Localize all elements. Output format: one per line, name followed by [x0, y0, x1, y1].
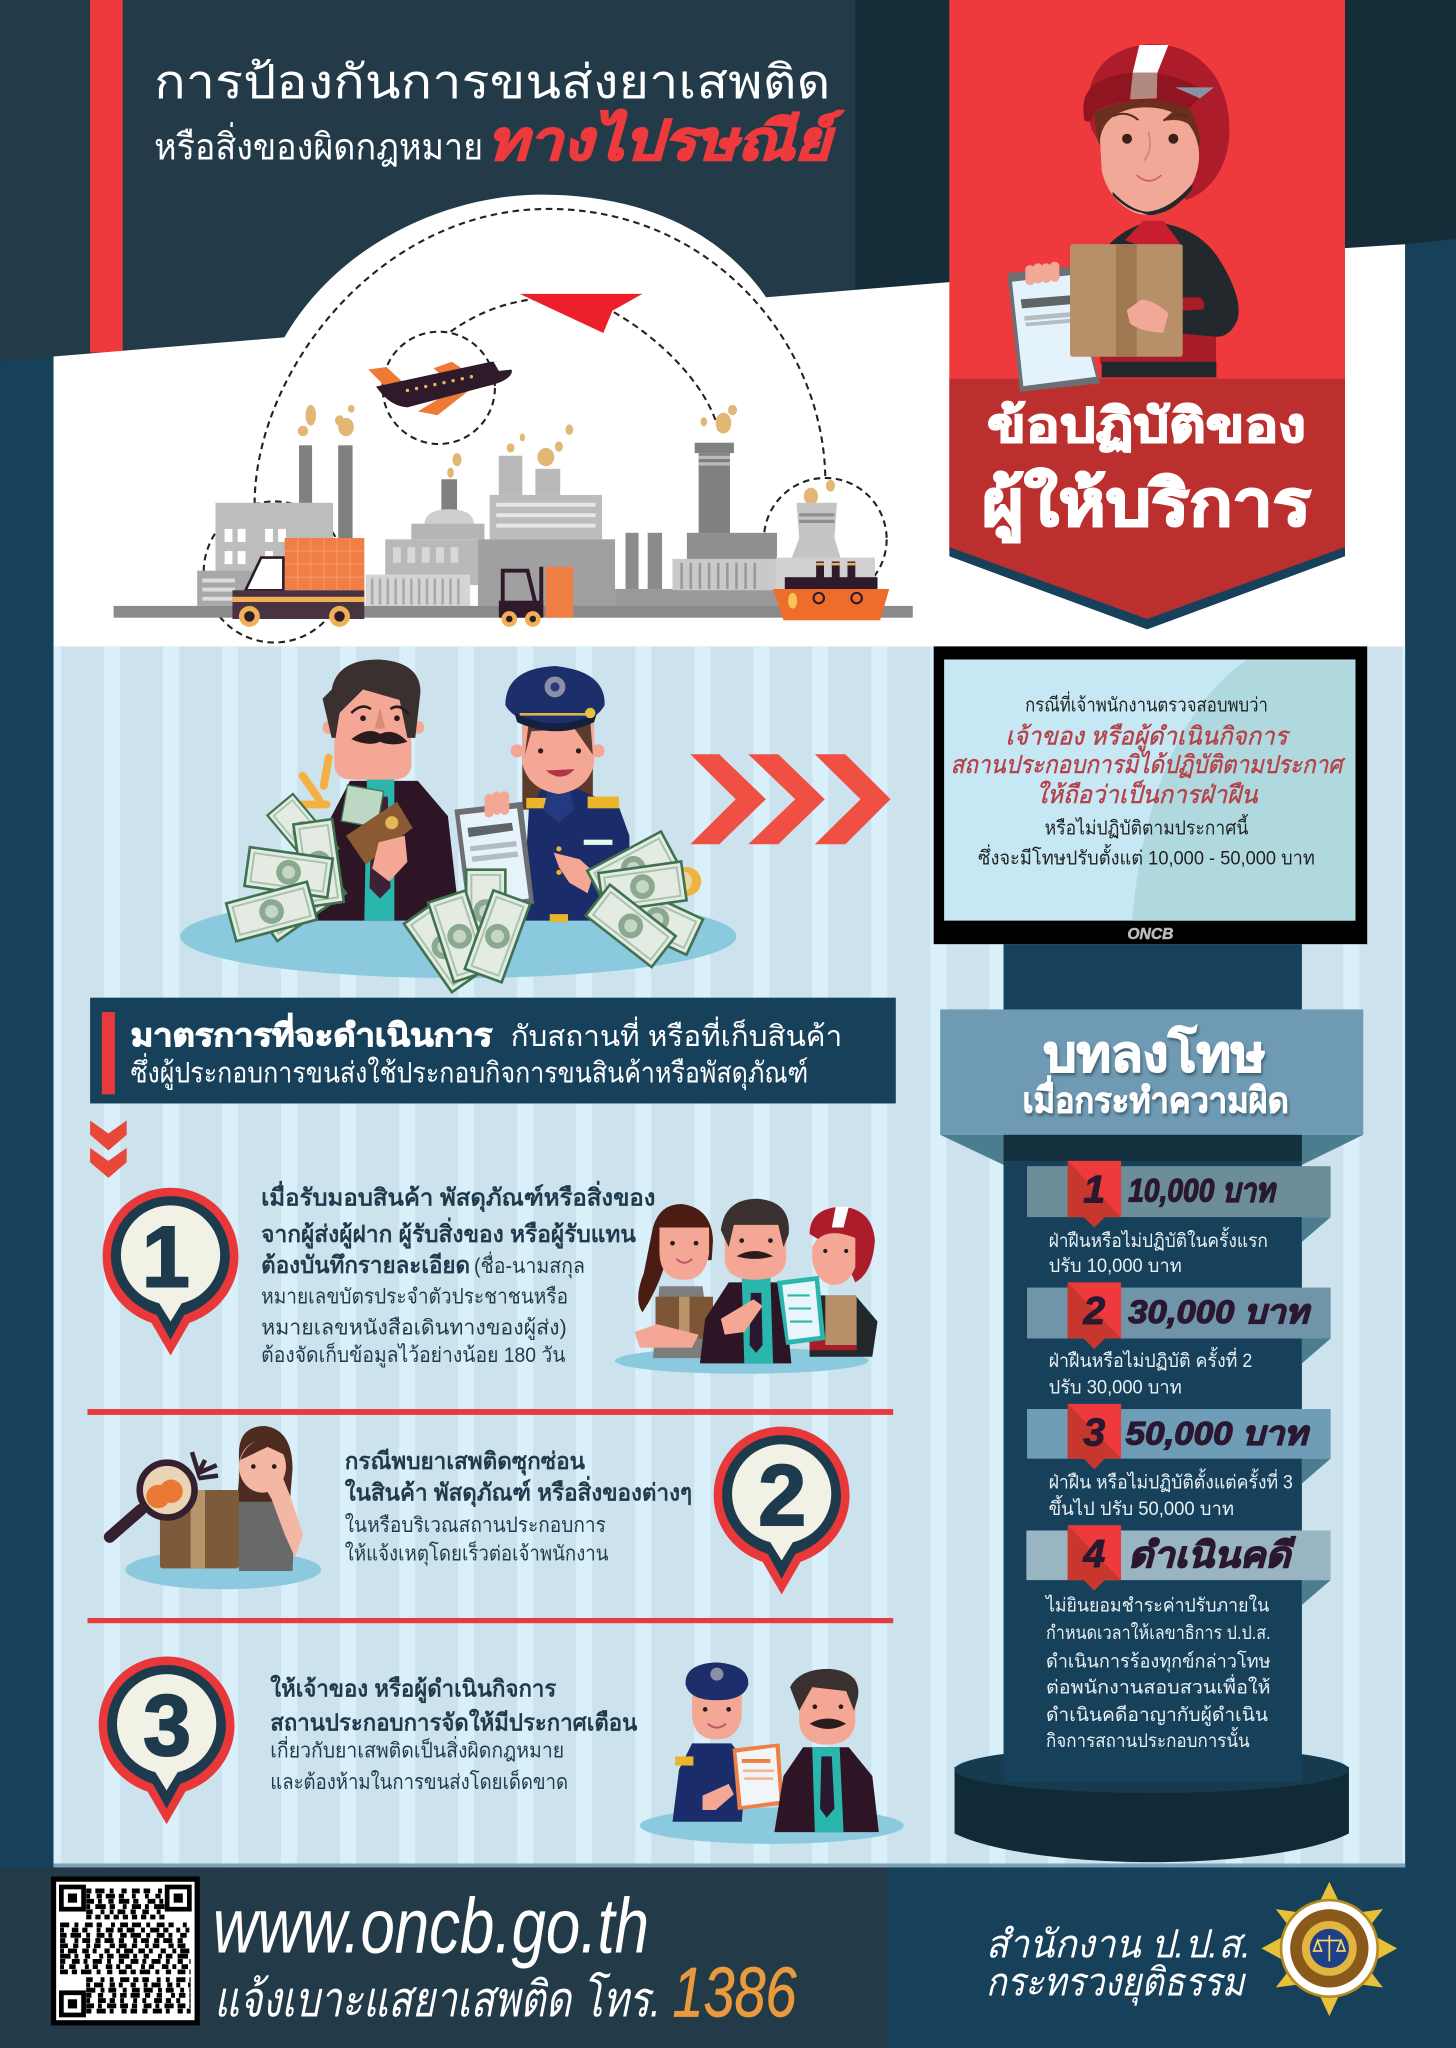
tier 2 description: ปรับ 30,000 บาท — [1049, 1377, 1182, 1398]
step 1 text: หมายเลขหนังสือเดินทางของผู้ส่ง) — [261, 1317, 567, 1341]
factory: ground — [114, 606, 913, 618]
notice text: สถานประกอบการมิได้ปฏิบัติตามประกาศ — [951, 750, 1346, 779]
factory: chimneys left — [299, 445, 353, 543]
icon: airplane — [368, 362, 512, 415]
step 1 text — [261, 1180, 656, 1368]
money scene ellipse — [180, 895, 736, 978]
tier 3 description: ขึ้นไป ปรับ 50,000 บาท — [1049, 1495, 1234, 1520]
agency name: สำนักงาน ป.ป.ส. — [986, 1924, 1251, 1967]
notice text — [951, 692, 1346, 869]
icon: paper plane — [520, 294, 642, 333]
panel: measures header: ซึ่งผู้ประกอบการขนส่งใช้ประกอบกิจการขนสินค้าหรือพัสดุภัณฑ์ — [131, 1053, 808, 1091]
step 3 pin: 3 — [143, 1678, 191, 1774]
divider red line 1 — [87, 1409, 893, 1415]
step 1 text: เมื่อรับมอบสินค้า พัสดุภัณฑ์หรือสิ่งของ — [261, 1180, 656, 1212]
tier 4 description — [1044, 1594, 1271, 1752]
illustration: police officer with clipboard — [454, 666, 629, 922]
factory: central block — [499, 456, 522, 495]
illustration: man with wallet — [297, 659, 460, 921]
red vertical stripe — [90, 0, 123, 353]
illustration: staff group — [615, 1199, 878, 1374]
icon: ship — [773, 562, 889, 620]
panel: penalties banner: บทลงโทษ — [1043, 1024, 1265, 1082]
fine tier 1 — [1027, 1161, 1331, 1277]
step 3 text: สถานประกอบการจัดให้มีประกาศเตือน — [270, 1708, 637, 1735]
step 1 text: (ชื่อ-นามสกุล — [474, 1251, 585, 1279]
tier 4 description: ดำเนินคดีอาญากับผู้ดำเนิน — [1046, 1704, 1268, 1726]
illustration: courier with parcel — [1007, 44, 1239, 392]
banner lower dark red — [949, 379, 1345, 620]
tier 3 description — [1049, 1469, 1293, 1520]
cash: centre pile — [404, 870, 530, 992]
icon: down chevrons — [90, 1120, 127, 1178]
tier 4 description: กิจการสถานประกอบการนั้น — [1046, 1727, 1250, 1752]
fine tier 3: 50,000 บาท — [1126, 1414, 1311, 1451]
factory: smoke puffs — [298, 405, 835, 505]
fine tier 4 — [1026, 1525, 1331, 1752]
step 2 pin: 2 — [758, 1448, 806, 1544]
step 1 text: ต้องจัดเก็บข้อมูลไว้อย่างน้อย 180 วัน — [261, 1341, 565, 1368]
factory: right chimney group — [625, 533, 639, 592]
tier 2 description: ฝ่าฝืนหรือไม่ปฏิบัติ ครั้งที่ 2 — [1049, 1347, 1252, 1372]
cash: left pile — [226, 794, 346, 941]
hotline number: 1386 — [673, 1952, 797, 2031]
step 2 pin — [714, 1427, 850, 1594]
step 2 text — [345, 1448, 692, 1567]
panel: monitor notice — [934, 646, 1367, 944]
factory skyline — [114, 405, 913, 618]
tier 4 description: กำหนดเวลาให้เลขาธิการ ป.ป.ส. — [1046, 1622, 1271, 1644]
banner heading 2: ผู้ให้บริการ — [982, 467, 1311, 543]
notice text: เจ้าของ หรือผู้ดำเนินกิจการ — [1005, 723, 1290, 751]
tier 4 description: ดำเนินการร้องทุกข์กล่าวโทษ — [1046, 1651, 1271, 1674]
QR code — [51, 1877, 200, 2025]
tier 1 description — [1049, 1227, 1268, 1277]
panel: measures header: มาตรการที่จะดำเนินการ — [131, 1013, 492, 1053]
step 2 text: ในสินค้า พัสดุภัณฑ์ หรือสิ่งของต่างๆ — [345, 1475, 692, 1507]
agency name: กระทรวงยุติธรรม — [986, 1961, 1246, 2006]
banner navy edge — [949, 547, 1345, 629]
tier 3 description: ฝ่าฝืน หรือไม่ปฏิบัติตั้งแต่ครั้งที่ 3 — [1049, 1469, 1293, 1494]
coin — [671, 867, 701, 896]
fine tier 2: 30,000 บาท — [1128, 1293, 1312, 1330]
illustration: officer and owner — [640, 1662, 904, 1844]
pillar base — [955, 1746, 1349, 1862]
title: หรือสิ่งของผิดกฎหมาย — [154, 121, 483, 167]
panel: penalties banner — [940, 1009, 1363, 1165]
icon: truck — [232, 538, 364, 627]
tier 2 description — [1049, 1347, 1252, 1398]
step 3 text: ให้เจ้าของ หรือผู้ดำเนินกิจการ — [270, 1674, 557, 1703]
panel: striped light blue — [54, 646, 1405, 1867]
arrow: three chevrons — [690, 754, 891, 844]
panel: penalties banner: เมื่อกระทำความผิด — [1022, 1076, 1289, 1121]
tier 1 description: ปรับ 10,000 บาท — [1049, 1256, 1182, 1277]
dark column right of red panel — [1345, 0, 1456, 340]
cash: right pile — [586, 831, 703, 967]
hotline: แจ้งเบาะแสยาเสพติด โทร. — [214, 1971, 661, 2027]
fine tier 3: 3 — [1083, 1412, 1105, 1455]
icon: agency emblem — [1261, 1882, 1397, 2016]
step 2 text: ในหรือบริเวณสถานประกอบการ — [345, 1513, 606, 1537]
notice text: ซึ่งจะมีโทษปรับตั้งแต่ 10,000 - 50,000 บาท — [978, 843, 1315, 869]
fine tier 3 — [1027, 1404, 1331, 1520]
fine tier 2 — [1027, 1282, 1331, 1398]
pillar — [1004, 944, 1302, 1783]
notice text: ให้ถือว่าเป็นการฝ่าฝืน — [1036, 780, 1259, 809]
cash piles — [226, 794, 703, 992]
notice text: หรือไม่ปฏิบัติตามประกาศนี้ — [1045, 813, 1249, 839]
title highlight: ทางไปรษณีย์ — [487, 108, 844, 171]
website: www.oncb.go.th — [213, 1881, 649, 1969]
factory: dome building — [441, 479, 457, 511]
dark column left of red panel — [855, 0, 949, 366]
panel: monitor notice: ONCB — [1127, 926, 1173, 943]
notice text: กรณีที่เจ้าพนักงานตรวจสอบพบว่า — [1025, 692, 1268, 717]
tier 1 description: ฝ่าฝืนหรือไม่ปฏิบัติในครั้งแรก — [1049, 1227, 1268, 1252]
agency name — [986, 1924, 1251, 2006]
title — [154, 55, 844, 171]
fine tier 4: 4 — [1082, 1533, 1105, 1576]
dashed delivery routes — [204, 209, 887, 642]
footer — [0, 1867, 1456, 2048]
step 1 text: จากผู้ส่งผู้ฝาก ผู้รับสิ่งของ หรือผู้รับแทน — [261, 1217, 636, 1249]
white arch behind factory — [268, 195, 783, 392]
banner heading: ข้อปฏิบัติของ — [987, 398, 1306, 451]
panel: measures header — [90, 998, 896, 1103]
panel: measures header: กับสถานที่ หรือที่เก็บสินค้า — [511, 1016, 842, 1053]
tier 4 description: ต่อพนักงานสอบสวนเพื่อให้ — [1046, 1674, 1271, 1699]
fine tier 4: ดำเนินคดี — [1128, 1536, 1296, 1575]
panel: provider banner — [949, 0, 1345, 629]
side band: right blue — [1405, 239, 1456, 1880]
step 2 text: กรณีพบยาเสพติดซุกซ่อน — [345, 1448, 585, 1476]
white diagonal area — [54, 244, 1405, 653]
step 1 pin — [103, 1188, 238, 1355]
fine tier 1: 10,000 บาท — [1128, 1171, 1278, 1208]
icon: forklift — [499, 567, 573, 627]
step 1 text: ต้องบันทึกรายละเอียด — [261, 1252, 470, 1278]
divider red line 2 — [87, 1618, 893, 1623]
step 3 text: และต้องห้ามในการขนส่งโดยเด็ดขาด — [270, 1768, 568, 1794]
fine tier 1: 1 — [1083, 1169, 1105, 1212]
fine tier 2: 2 — [1082, 1290, 1105, 1333]
step 1 pin: 1 — [142, 1209, 190, 1305]
side band: left blue — [0, 357, 54, 1880]
step 2 text: ให้แจ้งเหตุโดยเร็วต่อเจ้าพนักงาน — [345, 1540, 609, 1567]
step 3 text: เกี่ยวกับยาเสพติดเป็นสิ่งผิดกฎหมาย — [270, 1736, 564, 1763]
step 3 pin — [99, 1656, 235, 1824]
step 1 text: หมายเลขบัตรประจำตัวประชาชนหรือ — [261, 1285, 568, 1308]
title: การป้องกันการขนส่งยาเสพติด — [154, 55, 831, 108]
tier 4 description: ไม่ยินยอมชำระค่าปรับภายใน — [1044, 1594, 1269, 1616]
illustration: worried woman with magnifier — [110, 1426, 321, 1589]
step 3 text — [270, 1674, 637, 1794]
